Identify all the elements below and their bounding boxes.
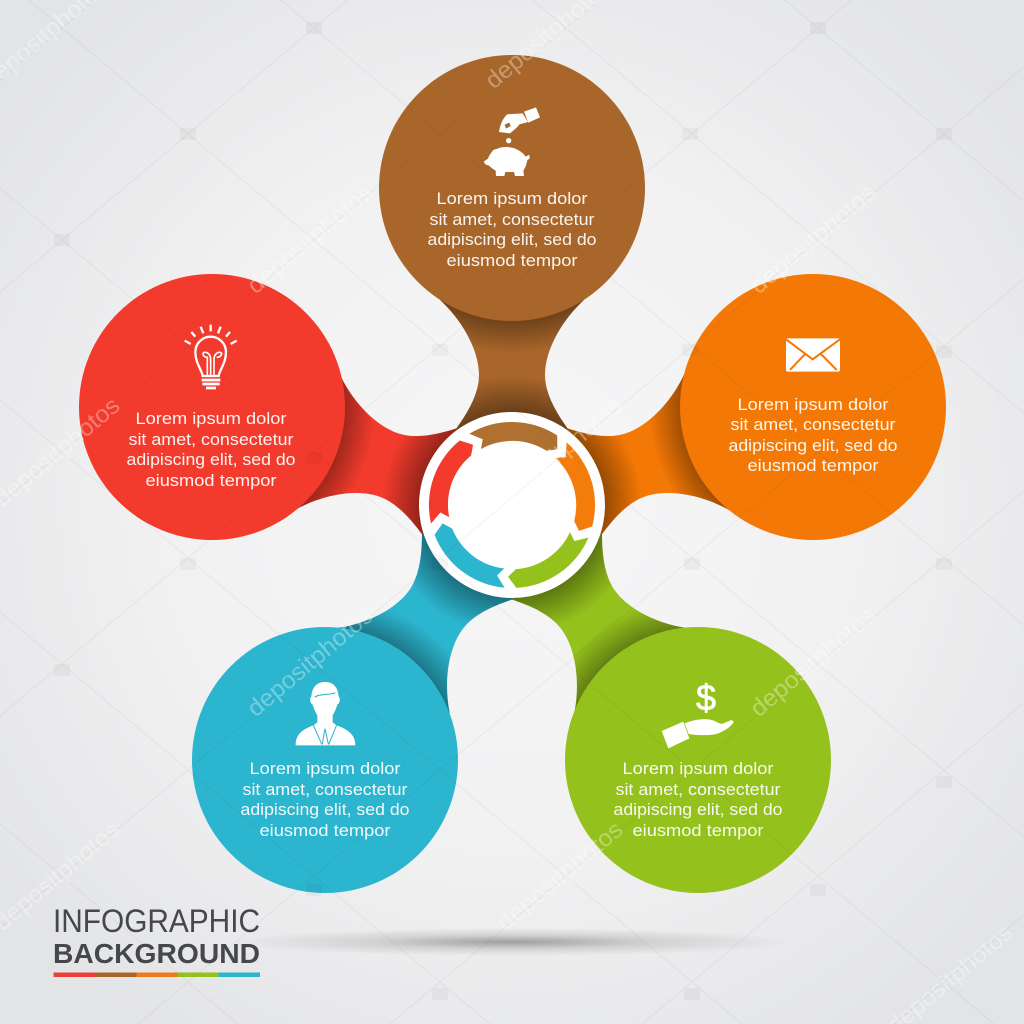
text: brown: sit amet, consectetur (430, 211, 595, 229)
text: blue (240, 760, 410, 840)
connector: blue (333, 463, 570, 713)
ground shadow (232, 928, 792, 956)
panel: orange mail (680, 274, 946, 540)
text: green (614, 760, 782, 840)
text: orange: adipiscing elit, sed do (728, 437, 898, 455)
colour bar (54, 972, 260, 977)
watermark: depositphotos (242, 602, 378, 722)
heading: infographic: INFOGRAPHIC (53, 903, 260, 939)
text: orange: sit amet, consectetur (730, 416, 896, 434)
connector: green (454, 463, 691, 713)
arrow: red (420, 436, 474, 529)
text: orange: Lorem ipsum dolor (738, 396, 889, 414)
central ring with cycle arrows (419, 412, 605, 599)
text: red (126, 410, 296, 490)
watermark: depositphotos (745, 179, 881, 299)
text: red: Lorem ipsum dolor (136, 410, 287, 428)
connector: brown (440, 300, 584, 505)
text: blue: sit amet, consectetur (242, 781, 408, 799)
text: red: adipiscing elit, sed do (126, 451, 296, 469)
watermark: depositphotos (745, 602, 881, 722)
text: green: Lorem ipsum dolor (622, 760, 774, 778)
panel: green money (565, 627, 831, 893)
text: brown: adipiscing elit, sed do (428, 231, 596, 249)
heading: background: BACKGROUND (53, 938, 260, 969)
text: blue: adipiscing elit, sed do (240, 801, 410, 819)
text: brown: eiusmod tempor (446, 252, 578, 270)
icon: hand with dollar: $ (696, 677, 716, 718)
icon: envelope (786, 338, 840, 372)
text: brown: Lorem ipsum dolor (436, 190, 588, 208)
text: brown (428, 190, 596, 270)
panel: red idea (79, 274, 345, 540)
watermark: depositphotos (492, 392, 628, 512)
icon: hand with dollar (662, 677, 734, 748)
watermark: depositphotos (242, 179, 378, 299)
text: green: eiusmod tempor (632, 822, 764, 840)
text: green: sit amet, consectetur (616, 781, 781, 799)
text: blue: Lorem ipsum dolor (250, 760, 401, 778)
connector: red (295, 373, 534, 573)
arrow: brown (469, 422, 557, 451)
arrow: green (507, 524, 595, 599)
icon: light bulb (185, 325, 237, 388)
connector: orange (490, 373, 729, 573)
panel: blue person (192, 627, 458, 893)
text: red: sit amet, consectetur (128, 431, 294, 449)
watermark: depositphotos (492, 816, 628, 936)
text: orange: eiusmod tempor (748, 457, 879, 475)
text: red: eiusmod tempor (146, 472, 277, 490)
icon: businessman (296, 682, 355, 745)
arrow: orange (550, 439, 605, 531)
title block (53, 903, 260, 977)
panel: brown savings (379, 55, 645, 321)
text: orange (728, 396, 898, 475)
arrow: blue (427, 522, 515, 597)
text: green: adipiscing elit, sed do (614, 801, 782, 819)
text: blue: eiusmod tempor (260, 822, 391, 840)
icon: hand and piggy bank (484, 107, 540, 176)
